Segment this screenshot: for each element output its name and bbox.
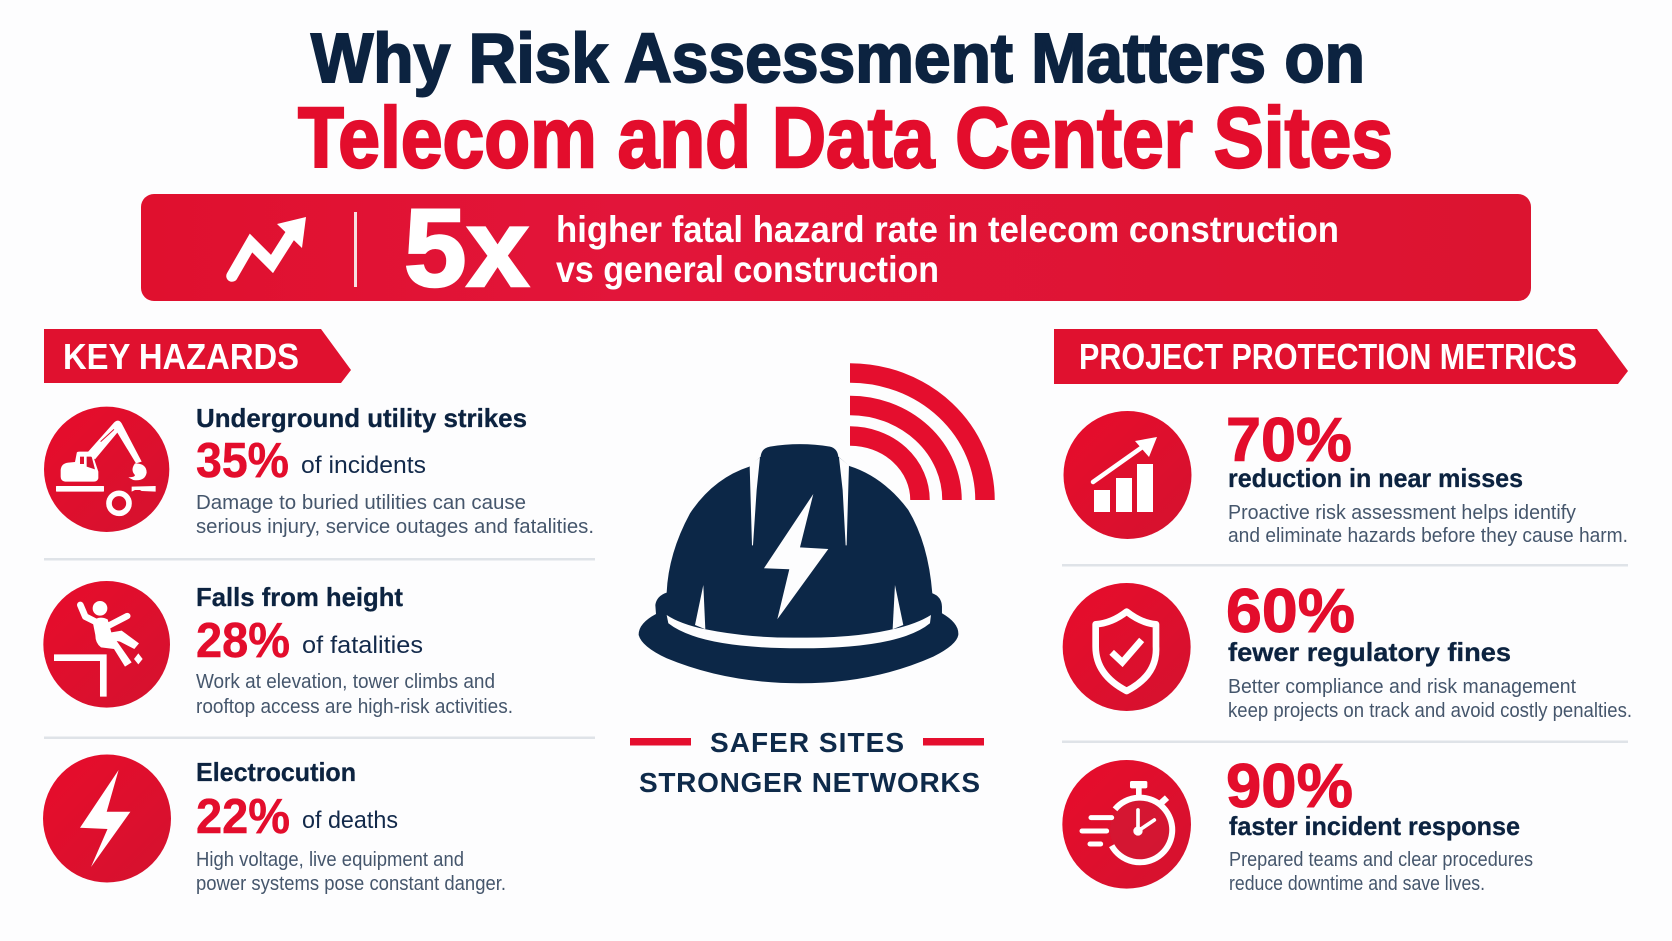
panel: underground utility strikes — [44, 403, 594, 538]
metric text: keep projects on track and avoid costly penalties. — [1228, 700, 1632, 722]
icon: lightning bolt — [43, 754, 171, 882]
hazard text: Work at elevation, tower climbs and — [196, 671, 495, 693]
center: hard hat with signal — [630, 373, 985, 798]
panel: near misses metric — [1064, 406, 1628, 547]
metric text — [1226, 752, 1533, 895]
hazard text: Damage to buried utilities can cause — [196, 492, 526, 514]
icon: falling worker — [43, 581, 170, 708]
hazard text: High voltage, live equipment and — [196, 849, 464, 871]
tagline — [630, 727, 984, 798]
hazard text: of incidents — [301, 452, 426, 479]
title: Telecom and Data Center Sites — [298, 91, 1393, 186]
hazard text: Electrocution — [196, 757, 356, 787]
big stat 5x: 5x — [404, 187, 529, 310]
heading: key hazards — [44, 329, 351, 383]
banner text: higher fatal hazard rate in telecom construction — [556, 209, 1339, 250]
hazard text: of deaths — [302, 807, 398, 834]
icon: hard hat — [639, 444, 958, 683]
banner text — [556, 209, 1339, 290]
metric text: and eliminate hazards before they cause harm. — [1228, 525, 1628, 547]
icon: stopwatch — [1062, 760, 1191, 889]
metric text — [1226, 577, 1632, 722]
icon: signal arcs — [850, 373, 985, 500]
title: Why Risk Assessment Matters on — [311, 19, 1365, 97]
banner: 5x fatal hazard rate — [141, 187, 1531, 310]
hazard text: serious injury, service outages and fatalities. — [196, 516, 594, 538]
heading: project protection metrics: PROJECT PROTECTION METRICS — [1079, 336, 1577, 377]
hazard text: 28% — [196, 614, 290, 668]
hazard text: of fatalities — [302, 632, 423, 659]
hazard text: power systems pose constant danger. — [196, 873, 506, 895]
panel: falls from height — [43, 581, 513, 718]
hazard text — [196, 403, 594, 538]
metric text: Better compliance and risk management — [1228, 676, 1576, 698]
hazard text — [196, 757, 506, 895]
metric text: fewer regulatory fines — [1228, 637, 1511, 667]
tagline: STRONGER NETWORKS — [639, 767, 980, 798]
metric text: 70% — [1226, 406, 1352, 475]
metric text — [1226, 406, 1628, 547]
icon: rising trend arrow — [232, 217, 306, 276]
metric text: reduction in near misses — [1228, 463, 1523, 493]
icon: bar chart with arrow — [1064, 411, 1192, 539]
hazard text — [196, 582, 513, 718]
metric text: faster incident response — [1229, 811, 1520, 841]
heading: key hazards: KEY HAZARDS — [63, 336, 299, 377]
heading: project protection metrics — [1054, 329, 1628, 384]
title — [298, 19, 1393, 186]
icon: shield with check — [1063, 583, 1191, 711]
tagline: SAFER SITES — [710, 727, 904, 758]
hazard text: rooftop access are high-risk activities. — [196, 696, 513, 718]
panel: incident response metric — [1062, 752, 1533, 895]
banner text: vs general construction — [556, 249, 939, 290]
panel: regulatory fines metric — [1063, 577, 1632, 722]
metric text: reduce downtime and save lives. — [1229, 873, 1485, 895]
panel: electrocution — [43, 754, 506, 895]
metric text: 90% — [1226, 752, 1353, 821]
metric text: 60% — [1226, 577, 1355, 646]
icon: excavator — [44, 407, 169, 532]
hazard text: Falls from height — [196, 582, 403, 612]
hazard text: 35% — [196, 434, 289, 488]
metric text: Prepared teams and clear procedures — [1229, 849, 1533, 871]
hazard text: 22% — [196, 790, 290, 844]
metric text: Proactive risk assessment helps identify — [1228, 502, 1576, 524]
hazard text: Underground utility strikes — [196, 403, 527, 433]
